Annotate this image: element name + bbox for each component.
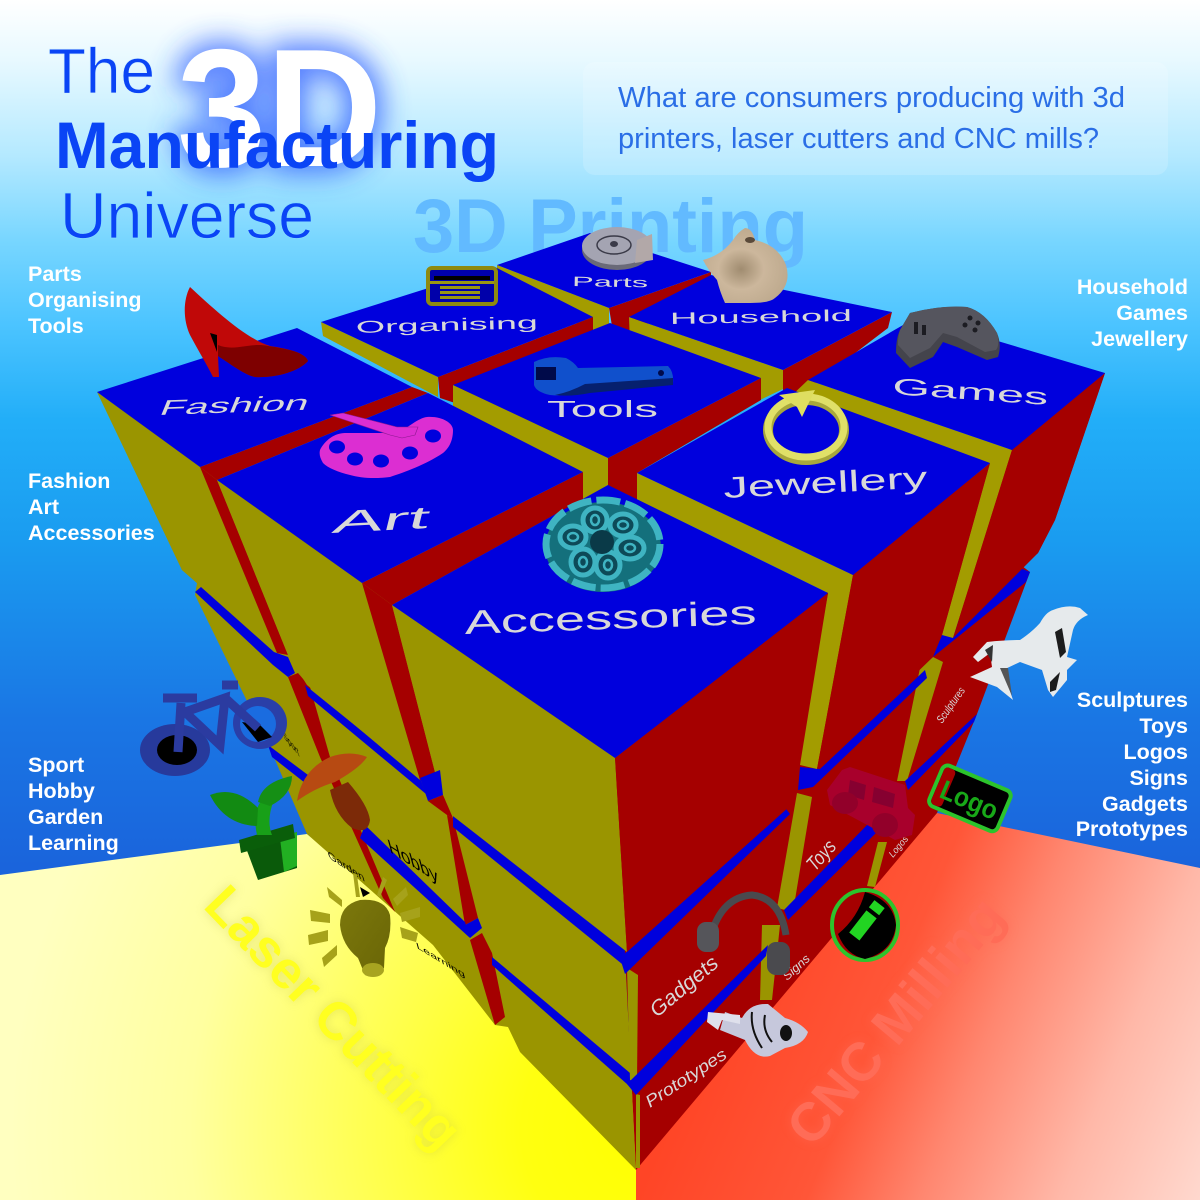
laser cutting floor [0,834,640,1200]
heading: Laser Cutting: Laser Cutting [193,874,473,1161]
icon: info badge [832,890,898,960]
side labels: CNC faces: Toys [802,835,841,875]
side labels: CNC faces [642,685,968,1111]
icon: game controller [896,307,1000,368]
title text [48,35,499,252]
labels: left upper categories [28,262,141,338]
icon: wrench [534,357,673,396]
face label: Organising: Organising [356,313,538,337]
side labels: CNC faces: Sculptures [935,685,968,726]
cube: Tools [453,323,761,505]
icon: ring [768,390,844,460]
question panel: printers, laser cutters and CNC mills? [618,123,1099,155]
cube: Games [787,317,1105,638]
icon: paint palette [320,413,453,478]
labels: left upper categories: Organising [28,288,141,312]
icon: piggy bank [703,228,788,303]
labels: left upper categories: Parts [28,262,82,286]
heading: Laser Cutting: Laser Cutting [193,874,473,1161]
cube: lower right body [615,373,1105,1170]
face label: Parts: Parts [572,274,648,290]
icon: toy car [827,767,915,840]
side labels: CNC faces: Gadgets [645,951,723,1022]
face label: Fashion: Fashion [156,390,314,420]
icon: high heel [185,287,308,377]
CNC milling floor [636,813,1200,1200]
face label: Jewellery: Jewellery [723,462,928,505]
labels: right lower categories: Logos [1124,740,1188,764]
labels: right lower categories: Gadgets [1102,792,1188,816]
cube: Art [217,393,583,780]
cube: Household [629,275,892,405]
side labels: CNC faces: Prototypes [642,1044,731,1111]
icon: lattice flower accessory [545,500,661,592]
icon: logo badge: Logo [936,775,1003,826]
labels: left middle categories: Accessories [28,521,155,545]
heading: CNC Milling: CNC Milling [775,886,1016,1157]
labels: left middle categories: Art [28,495,59,519]
labels: left lower categories: Sport [28,753,84,777]
title: 3D glow word: 3D [177,14,382,202]
question panel: What are consumers producing with 3d [618,82,1125,114]
icon: brake disc [582,227,653,270]
icon: organiser rack [428,268,496,304]
labels: right upper categories: Household [1077,275,1188,299]
labels: left upper categories: Tools [28,314,84,338]
icon: horse sculpture [970,606,1088,700]
question panel [583,62,1168,175]
cube: Jewellery [637,388,990,769]
title text: Manufacturing [55,108,499,182]
cube: Accessories [392,485,828,952]
cube: lower left body [98,393,636,1170]
icon: white plug prototype [707,1004,808,1057]
icon: light bulb [308,873,420,977]
side labels: laser faces [282,729,466,980]
labels: right upper categories [1077,275,1188,351]
face label: Tools: Tools [547,396,658,422]
cube: Organising [321,267,593,403]
icon: mushroom [297,754,370,830]
face label: Games: Games [892,373,1049,410]
labels: left middle categories: Fashion [28,469,110,493]
heading: CNC Milling: CNC Milling [775,886,1016,1157]
labels: right lower categories: Signs [1129,766,1188,790]
icon: potted plant [210,776,297,880]
face label: Accessories: Accessories [464,595,757,642]
labels: right lower categories: Sculptures [1077,688,1188,712]
face label: Household: Household [670,307,852,328]
face label: Art: Art [329,500,434,540]
cube: Fashion [97,328,428,655]
labels: right upper categories: Jewellery [1091,327,1188,351]
icon: headphones [697,895,790,975]
title: 3D glow word: 3D [177,14,382,202]
side labels: CNC faces: Logos [887,834,911,859]
labels: right lower categories [1076,688,1188,841]
title text: The [48,35,155,107]
cube: Parts [497,233,711,332]
side labels: laser faces: Hobby [385,835,442,889]
labels: left middle categories [28,469,155,545]
labels: left lower categories [28,753,119,855]
side labels: laser faces: Garden [326,848,366,885]
icon: bicycle [140,685,287,776]
labels: right upper categories: Games [1116,301,1188,325]
labels: left lower categories: Learning [28,831,119,855]
icon: logo badge [927,764,1013,833]
labels: right lower categories: Toys [1139,714,1188,738]
heading: 3D Printing: 3D Printing [413,184,808,269]
side labels: laser faces: Learning [415,940,466,980]
side labels: CNC faces: Signs [780,952,813,983]
title text: Universe [60,179,314,252]
labels: left lower categories: Hobby [28,779,95,803]
side labels: laser faces: Sport [282,729,300,760]
labels: right lower categories: Prototypes [1076,817,1188,841]
labels: left lower categories: Garden [28,805,103,829]
